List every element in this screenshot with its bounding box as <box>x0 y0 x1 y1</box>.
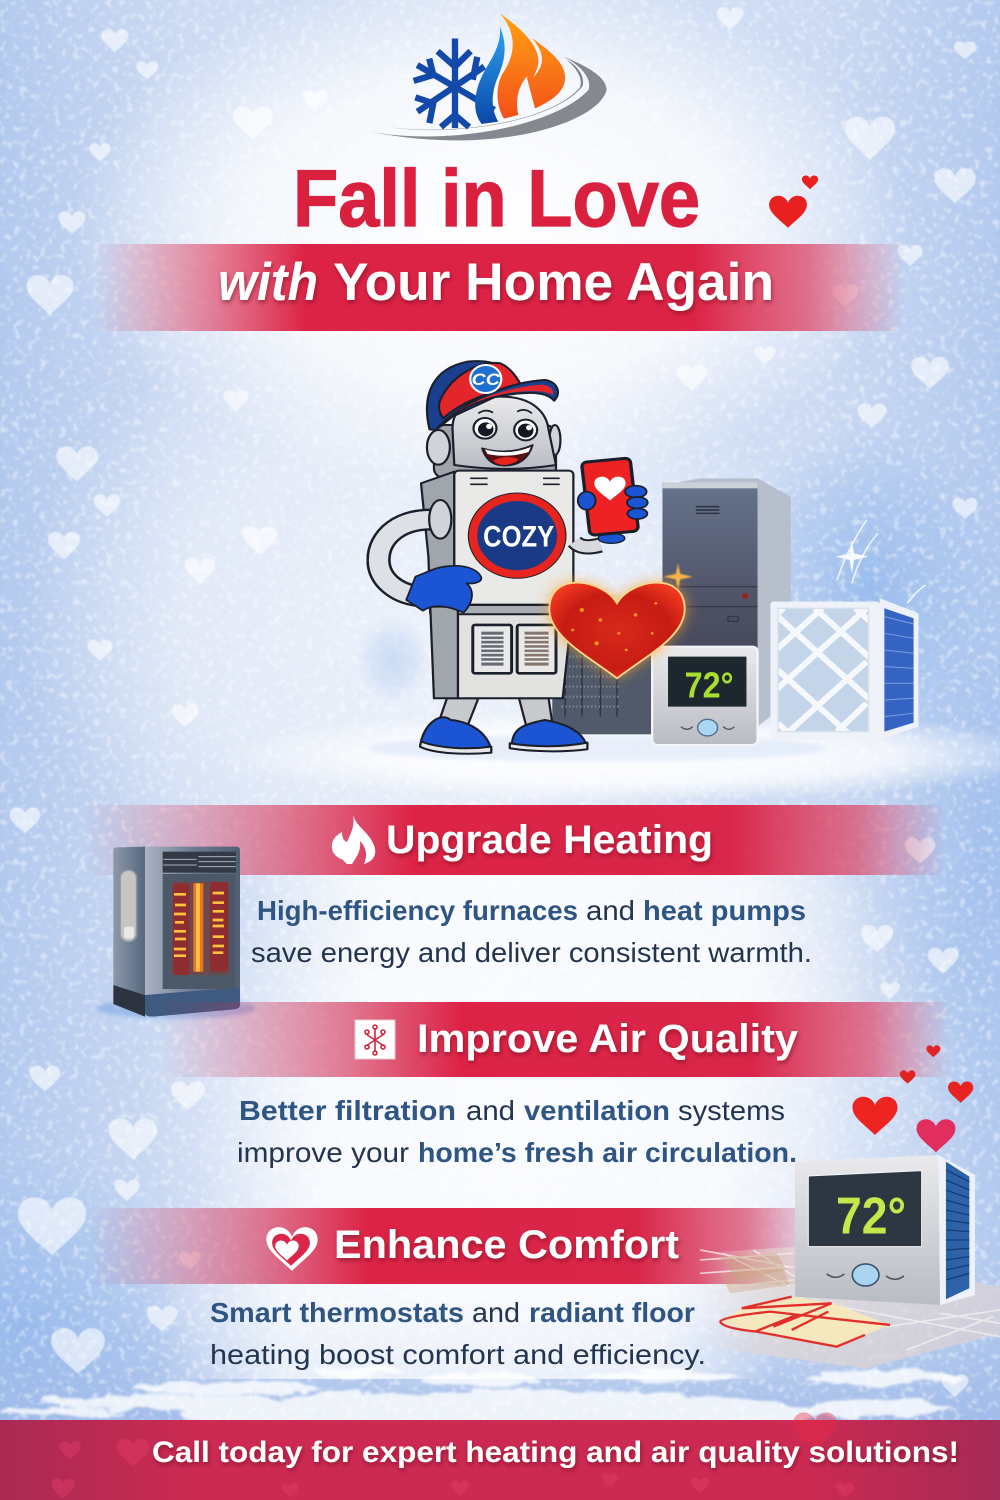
text: line one: radiant floor <box>529 1297 695 1328</box>
furnace cabinet <box>662 478 791 728</box>
text: line two <box>237 1137 797 1168</box>
right arm <box>574 542 600 547</box>
logo <box>370 13 607 140</box>
thermostat body: 72° <box>836 1186 906 1244</box>
text: line one: systems <box>678 1095 785 1126</box>
body <box>421 471 573 698</box>
thermostat body <box>795 1155 975 1305</box>
badge: cozy <box>468 493 566 578</box>
mascot <box>378 361 648 754</box>
decorative snow clouds <box>0 1367 965 1438</box>
text: line one: ventilation <box>524 1095 670 1126</box>
thermostat: 72 degrees: 72° <box>685 666 733 706</box>
thermostat: 72 degrees <box>652 647 758 745</box>
text: line one: and <box>472 1297 520 1328</box>
banner: with your home again: Your Home Again <box>333 253 774 312</box>
text: line one <box>239 1095 785 1126</box>
footer bar <box>0 1413 1000 1500</box>
banner: enhance comfort <box>90 1208 820 1284</box>
heading: Improve Air Quality <box>417 1017 799 1061</box>
text: line two: heating boost comfort and efficiency. <box>210 1339 706 1370</box>
icon: swoosh <box>370 57 607 140</box>
title: Fall in Love <box>293 154 700 244</box>
banner: with your home again <box>95 244 905 331</box>
panel: enhance comfort <box>90 1208 820 1379</box>
hearts near title <box>769 175 818 228</box>
icon: snowflake <box>417 42 492 125</box>
illustration: thermostat with radiant floor and hearts <box>700 1045 1000 1368</box>
phone with heart <box>578 458 648 543</box>
glowing heart <box>549 583 685 678</box>
banner: improve air quality <box>160 1002 950 1077</box>
legs and shoes <box>420 698 587 754</box>
icon: flame <box>332 815 375 864</box>
text: line one: High-efficiency furnaces <box>257 895 578 926</box>
hat <box>427 361 558 430</box>
icon: flame <box>475 13 565 124</box>
text: line one: and <box>466 1095 515 1126</box>
outdoor unit vents <box>552 645 656 734</box>
arm fill <box>574 542 600 547</box>
radiant floor <box>700 1247 1000 1368</box>
icon: heater <box>97 847 257 1018</box>
illustration: mascot and HVAC equipment <box>216 361 1000 802</box>
text: line one: heat pumps <box>643 895 806 926</box>
text: line one: and <box>586 895 635 926</box>
panel: upgrade heating <box>85 805 945 1002</box>
vents <box>473 625 556 673</box>
left arm and glove <box>378 500 481 613</box>
text: line one <box>210 1297 695 1328</box>
text: line one <box>257 895 806 926</box>
hat: CC <box>472 370 500 389</box>
banner: with your home again: with <box>218 253 318 312</box>
text: line one: Better filtration <box>239 1095 456 1126</box>
banner: upgrade heating <box>85 805 945 875</box>
heading: Upgrade Heating <box>386 818 713 862</box>
floating hearts <box>852 1045 973 1152</box>
sparkle <box>835 520 926 603</box>
heading: Enhance Comfort <box>334 1223 679 1267</box>
panel: improve air quality <box>160 1002 950 1208</box>
call to action: Call today for expert heating and air quality solutions! <box>152 1436 959 1469</box>
snow ground <box>216 617 1000 802</box>
head <box>452 397 556 469</box>
icon: heart <box>266 1227 318 1271</box>
air filter <box>737 598 918 740</box>
badge: cozy: COZY <box>483 520 554 553</box>
icon: air filter square <box>355 1020 395 1059</box>
text: line two: home’s fresh air circulation. <box>418 1137 797 1168</box>
text: line one: Smart thermostats <box>210 1297 464 1328</box>
text: line two: improve your <box>237 1137 409 1168</box>
neck <box>434 425 556 478</box>
text: line two: save energy and deliver consistent warmth. <box>251 937 812 968</box>
ears <box>427 425 560 465</box>
